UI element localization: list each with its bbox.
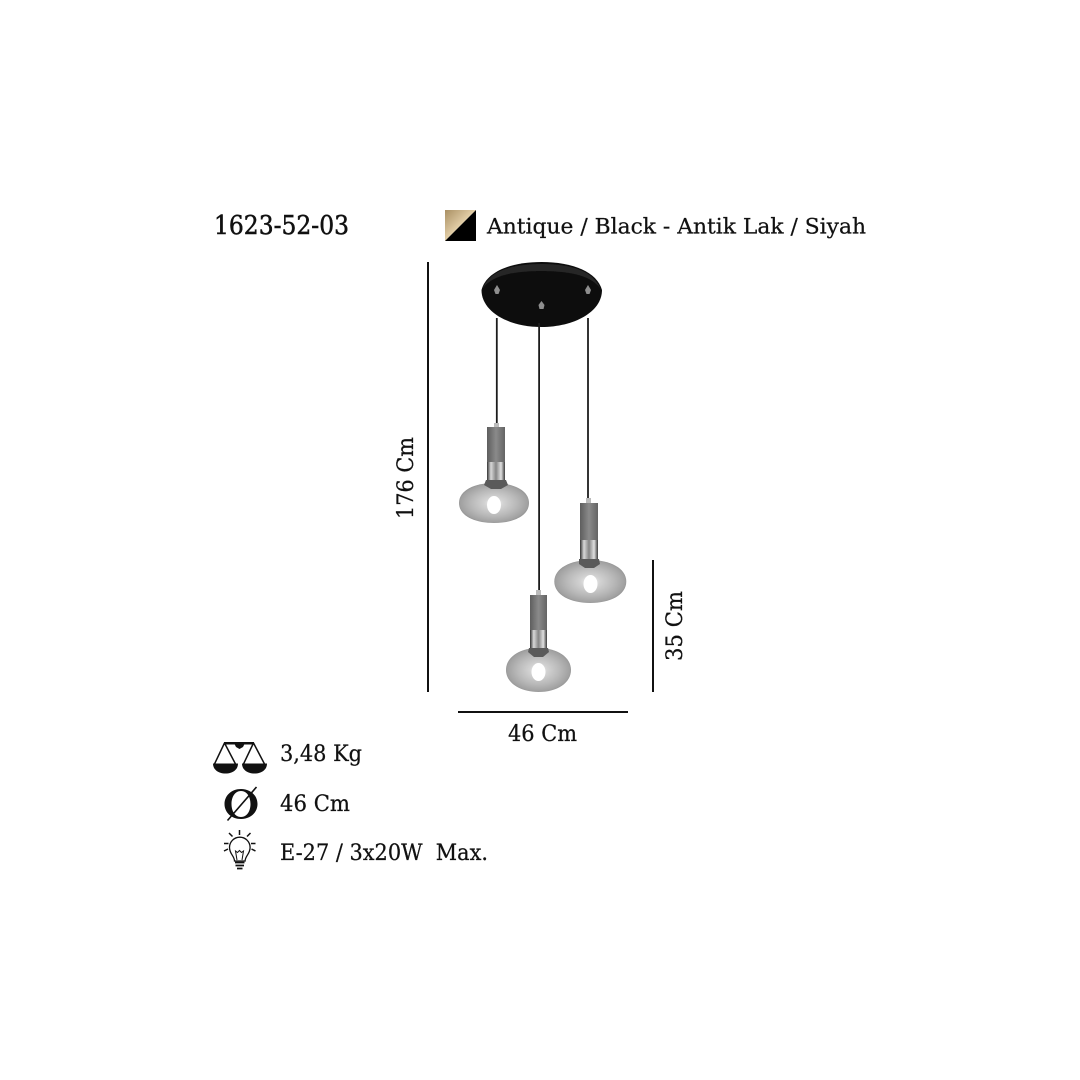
left pendant: [459, 423, 529, 523]
height label: 176 Cm: [394, 437, 419, 519]
right pendant: [554, 498, 626, 603]
right cord: [587, 318, 589, 503]
pendant lamp product image: [459, 262, 626, 692]
height dimension line: [427, 262, 429, 692]
finish colour swatch: [445, 210, 476, 241]
finish label: Antique / Black - Antik Lak / Siyah: [486, 214, 866, 240]
weight value: 3,48 Kg: [280, 742, 362, 767]
icon: weighing scale: [213, 742, 267, 774]
width dimension line: [458, 711, 628, 713]
centre cord: [538, 323, 540, 595]
width label: 46 Cm: [508, 722, 577, 747]
left cord: [496, 318, 498, 427]
ceiling canopy: [482, 262, 602, 327]
product code: 1623-52-03: [214, 211, 349, 241]
centre pendant: [506, 590, 571, 692]
icon: diameter symbol: [224, 787, 258, 820]
bulb specification: E-27 / 3x20W Max.: [280, 841, 488, 866]
icon: light bulb: [224, 830, 256, 868]
shade height label: 35 Cm: [663, 591, 688, 661]
diameter value: 46 Cm: [280, 792, 350, 817]
shade height dimension line: [652, 560, 654, 692]
